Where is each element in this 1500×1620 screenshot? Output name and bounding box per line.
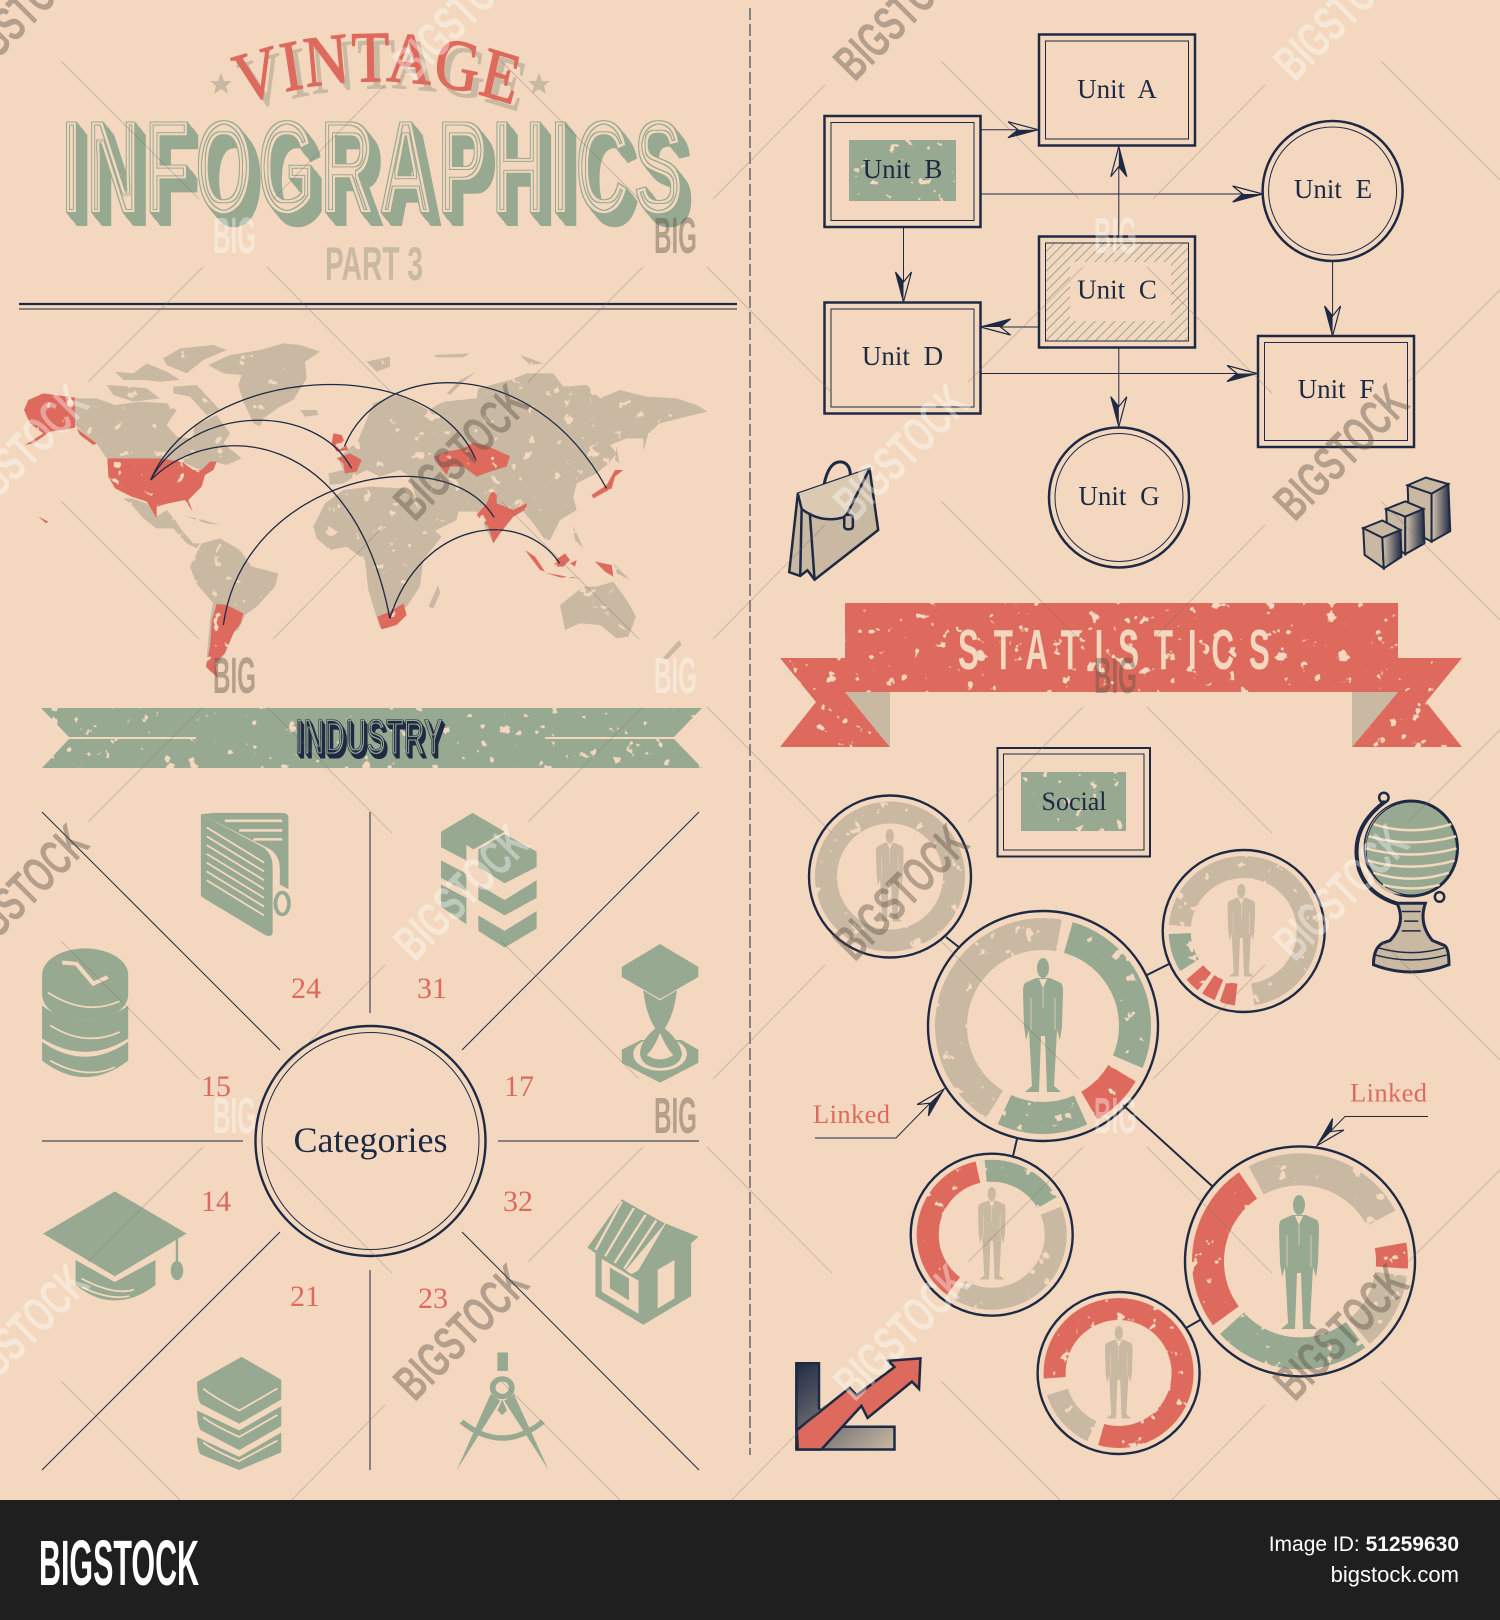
- icon: drafting compass: [457, 1352, 549, 1470]
- segment numbers: 24: [291, 972, 321, 1005]
- footer image id: Image ID: 51259630: [1269, 1533, 1459, 1556]
- circle: Unit E: Unit E: [1294, 174, 1372, 204]
- box: Unit D: [824, 302, 980, 414]
- watermark: BIGSTOCK diagonals: BIGSTOCK: [383, 814, 539, 970]
- icon: blocks: [441, 813, 537, 948]
- segment numbers: 14: [201, 1185, 231, 1218]
- watermark: BIGSTOCK diagonals: BIGSTOCK: [1263, 814, 1419, 970]
- panel: categories wheel: [42, 812, 699, 1470]
- connection arcs: [151, 383, 606, 625]
- node: top-left: [809, 796, 971, 958]
- icon: house: [587, 1199, 698, 1325]
- segment numbers: [201, 972, 534, 1315]
- heading: VINTAGE: VINTAGE: [236, 40, 525, 112]
- watermark: BIG marks: BIG: [213, 647, 256, 704]
- box: Unit D: Unit D: [862, 341, 943, 371]
- callout: Linked right: [1311, 1078, 1428, 1151]
- watermark: BIGSTOCK diagonals: BIGSTOCK: [383, 374, 539, 530]
- watermark: BIG marks: [213, 207, 1137, 1144]
- icon: graduation cap: [43, 1191, 187, 1301]
- text: BIG: [1094, 207, 1137, 264]
- segment numbers: 32: [503, 1185, 533, 1218]
- watermark: BIG marks: BIG: [654, 1087, 697, 1144]
- heading: INFOGRAPHICS: INFOGRAPHICS: [61, 92, 688, 241]
- box: Unit F: Unit F: [1298, 374, 1374, 404]
- box: Social: Social: [1042, 787, 1106, 816]
- box: Unit B: [824, 116, 980, 227]
- banner label: INDUSTRY: [295, 709, 443, 765]
- box: Unit B: Unit B: [863, 154, 942, 184]
- connector lines: [904, 130, 1333, 420]
- world map: [24, 343, 707, 678]
- box: Unit C: [1039, 236, 1195, 348]
- icon: globe: [1357, 793, 1457, 972]
- footer bar: BIGSTOCK: [39, 1527, 199, 1599]
- box: Unit C: Unit C: [1077, 274, 1157, 304]
- watermark: BIGSTOCK diagonals: BIGSTOCK: [1263, 374, 1419, 530]
- heading: VINTAGE: VINTAGE: [230, 33, 520, 104]
- watermark: BIG marks: BIG: [654, 647, 697, 704]
- text: BIG: [1094, 1087, 1137, 1144]
- segment numbers: 23: [418, 1282, 448, 1315]
- box: Unit A: Unit A: [1077, 74, 1157, 104]
- icon: coin stack: [42, 948, 128, 1077]
- watermark: BIG marks: BIG: [213, 1087, 256, 1144]
- subheading: PART 3: PART 3: [325, 237, 423, 290]
- text: BIG: [1094, 647, 1137, 704]
- box: Unit A: [1039, 34, 1195, 146]
- callout: Linked left: Linked: [813, 1099, 890, 1129]
- segment numbers: 15: [201, 1070, 231, 1103]
- icon: briefcase: [789, 462, 878, 580]
- node: lower-left: [911, 1154, 1073, 1316]
- segment numbers: 21: [290, 1280, 320, 1313]
- circle: Unit E: [1263, 121, 1403, 261]
- footer bar: [0, 1500, 1500, 1620]
- circle: Unit G: [1049, 428, 1189, 568]
- connectors: [946, 937, 1212, 1328]
- watermark: BIGSTOCK diagonals: BIGSTOCK: [1263, 1254, 1419, 1410]
- callout: Linked left: [813, 1083, 950, 1138]
- icon: folder: [201, 813, 289, 936]
- divider: [749, 8, 751, 1455]
- banner label: STATISTICS: [958, 617, 1285, 681]
- centre label: Categories: [294, 1120, 447, 1160]
- box: Unit F: [1258, 336, 1414, 447]
- segment numbers: 17: [504, 1070, 534, 1103]
- icon: bar blocks: [1363, 478, 1450, 568]
- callout: Linked right: Linked: [1350, 1078, 1427, 1108]
- panel: social network circles: [809, 796, 1415, 1454]
- node: top-right: [1163, 850, 1325, 1012]
- watermark: BIGSTOCK diagonals: BIGSTOCK: [383, 1254, 539, 1410]
- icon: hourglass: [622, 944, 698, 1083]
- watermark: BIGSTOCK diagonals: BIGSTOCK: [823, 814, 979, 970]
- spokes: [42, 812, 699, 1470]
- node: bottom: [1038, 1292, 1200, 1454]
- banner: STATISTICS: [780, 603, 1462, 747]
- heading: VINTAGE: [210, 33, 550, 112]
- watermark: BIGSTOCK diagonals: BIGSTOCK: [823, 1254, 979, 1410]
- node: main: [928, 911, 1158, 1141]
- circle: Unit G: Unit G: [1078, 481, 1160, 511]
- box: Social: [998, 748, 1150, 856]
- footer site: bigstock.com: [1331, 1562, 1459, 1587]
- panel: unit flowchart: [824, 34, 1414, 568]
- watermark: BIG marks: BIG: [213, 207, 256, 264]
- icon: rising arrow: [796, 1358, 920, 1449]
- icon: stacked books: [197, 1357, 281, 1470]
- segment numbers: 31: [417, 972, 447, 1005]
- banner: INDUSTRY: [41, 708, 702, 768]
- node: lower-right: [1185, 1146, 1415, 1376]
- arrowheads: [896, 122, 1341, 427]
- land masses: [24, 343, 707, 678]
- watermark: BIGSTOCK diagonals: BIGSTOCK: [823, 374, 979, 530]
- centre circle: [256, 1026, 486, 1256]
- double rule: [19, 304, 737, 309]
- watermark: BIG marks: BIG: [654, 207, 697, 264]
